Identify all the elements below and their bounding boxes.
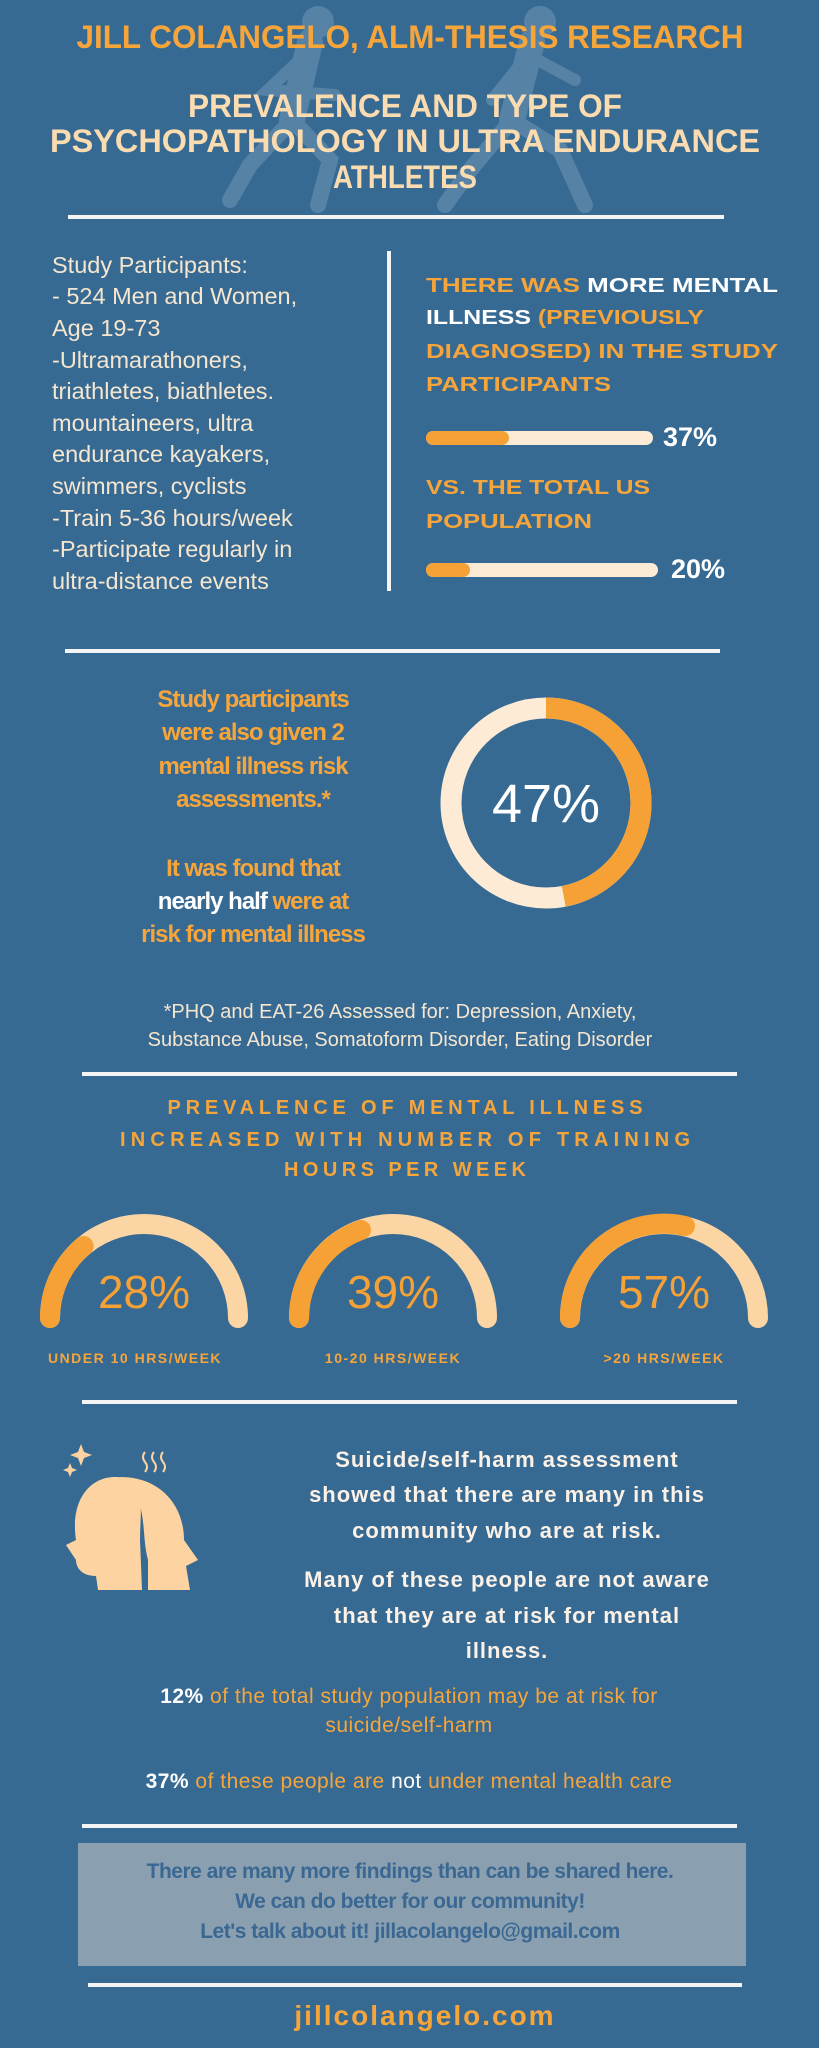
panel: comparison bars: THERE WAS MORE MENTAL — [426, 275, 778, 297]
statistics text: suicide/self-harm — [325, 1714, 493, 1737]
risk assessment text: assessments.* — [176, 786, 332, 813]
risk assessment text: mental illness risk — [158, 753, 349, 780]
study participants text: -Ultramarathoners, — [52, 347, 248, 373]
risk assessment text: nearly half were at — [158, 888, 349, 915]
panel: comparison bars: ILLNESS (PREVIOUSLY — [426, 307, 705, 329]
suicide assessment text: Suicide/self-harm assessment — [335, 1447, 679, 1472]
subtitle: PREVALENCE AND TYPE OF — [188, 88, 622, 124]
gauge 39% — [299, 1224, 487, 1366]
gauge 57% — [570, 1224, 758, 1366]
callout box — [78, 1843, 746, 1966]
study participants text: swimmers, cyclists — [52, 473, 247, 499]
study participants text: - 524 Men and Women, — [52, 283, 297, 309]
study participants text: -Participate regularly in — [52, 536, 292, 562]
footnote — [148, 1001, 653, 1051]
donut chart 47% — [451, 708, 641, 898]
donut chart 47%: 47% — [492, 774, 600, 834]
study participants text: triathletes, biathletes. — [52, 378, 274, 404]
suicide assessment text — [304, 1447, 710, 1663]
study participants text: mountaineers, ultra — [52, 410, 254, 436]
risk assessment text: It was found that — [166, 855, 341, 882]
subtitle — [50, 88, 760, 195]
study participants text — [52, 252, 297, 594]
panel: comparison bars: DIAGNOSED) IN THE STUDY — [426, 341, 779, 363]
gauge 28% — [48, 1224, 238, 1366]
risk assessment text: risk for mental illness — [141, 921, 366, 948]
statistics text: 37% of these people are not under mental health care — [146, 1770, 672, 1793]
suicide assessment text: that they are at risk for mental — [334, 1603, 680, 1628]
suicide assessment text: community who are at risk. — [352, 1518, 662, 1543]
gauge 28%: UNDER 10 HRS/WEEK — [48, 1350, 222, 1366]
footnote: *PHQ and EAT-26 Assessed for: Depression, Anxiety, — [164, 1001, 636, 1023]
study participants text: Age 19-73 — [52, 315, 160, 341]
icon: heads — [63, 1444, 198, 1590]
gauge 57%: 57% — [618, 1266, 710, 1318]
footnote: Substance Abuse, Somatoform Disorder, Eating Disorder — [148, 1029, 653, 1051]
gauge 28%: 28% — [98, 1266, 190, 1318]
statistics text — [146, 1685, 672, 1793]
suicide assessment text: illness. — [466, 1638, 548, 1663]
heading: training hours: PREVALENCE OF MENTAL ILLNESS — [168, 1097, 642, 1119]
panel: comparison bars: 20% — [671, 554, 725, 584]
statistics text: 12% of the total study population may be at risk for — [160, 1685, 658, 1708]
subtitle: ATHLETES — [333, 159, 477, 195]
risk assessment text: Study participants — [157, 686, 349, 713]
subtitle: PSYCHOPATHOLOGY IN ULTRA ENDURANCE — [50, 123, 760, 159]
study participants text: Study Participants: — [52, 252, 248, 278]
panel: comparison bars: POPULATION — [426, 511, 592, 533]
website: jillcolangelo.com — [293, 2000, 556, 2031]
risk assessment text — [141, 686, 366, 948]
panel: comparison bars — [426, 275, 779, 584]
panel: comparison bars: VS. THE TOTAL US — [426, 477, 650, 499]
heading: training hours: INCREASED WITH NUMBER OF TRAINING — [120, 1129, 690, 1151]
gauge 57%: >20 HRS/WEEK — [603, 1350, 725, 1366]
panel: comparison bars: 37% — [663, 422, 717, 452]
callout box: We can do better for our community! — [235, 1890, 585, 1913]
suicide assessment text: Many of these people are not aware — [304, 1567, 710, 1592]
heading: training hours: HOURS PER WEEK — [284, 1159, 527, 1181]
runners silhouette background — [230, 6, 585, 205]
heading: training hours — [120, 1097, 690, 1181]
callout box: There are many more findings than can be shared here. — [147, 1860, 673, 1883]
gauge 39%: 10-20 HRS/WEEK — [325, 1350, 461, 1366]
gauge 39%: 39% — [347, 1266, 439, 1318]
risk assessment text: were also given 2 — [161, 719, 345, 746]
study participants text: endurance kayakers, — [52, 441, 270, 467]
study participants text: -Train 5-36 hours/week — [52, 505, 293, 531]
title: JILL COLANGELO, ALM-THESIS RESEARCH — [76, 19, 744, 55]
panel: comparison bars: PARTICIPANTS — [426, 374, 611, 396]
suicide assessment text: showed that there are many in this — [309, 1482, 705, 1507]
callout box: Let's talk about it! jillacolangelo@gmail.com — [200, 1920, 620, 1943]
study participants text: ultra-distance events — [52, 568, 269, 594]
